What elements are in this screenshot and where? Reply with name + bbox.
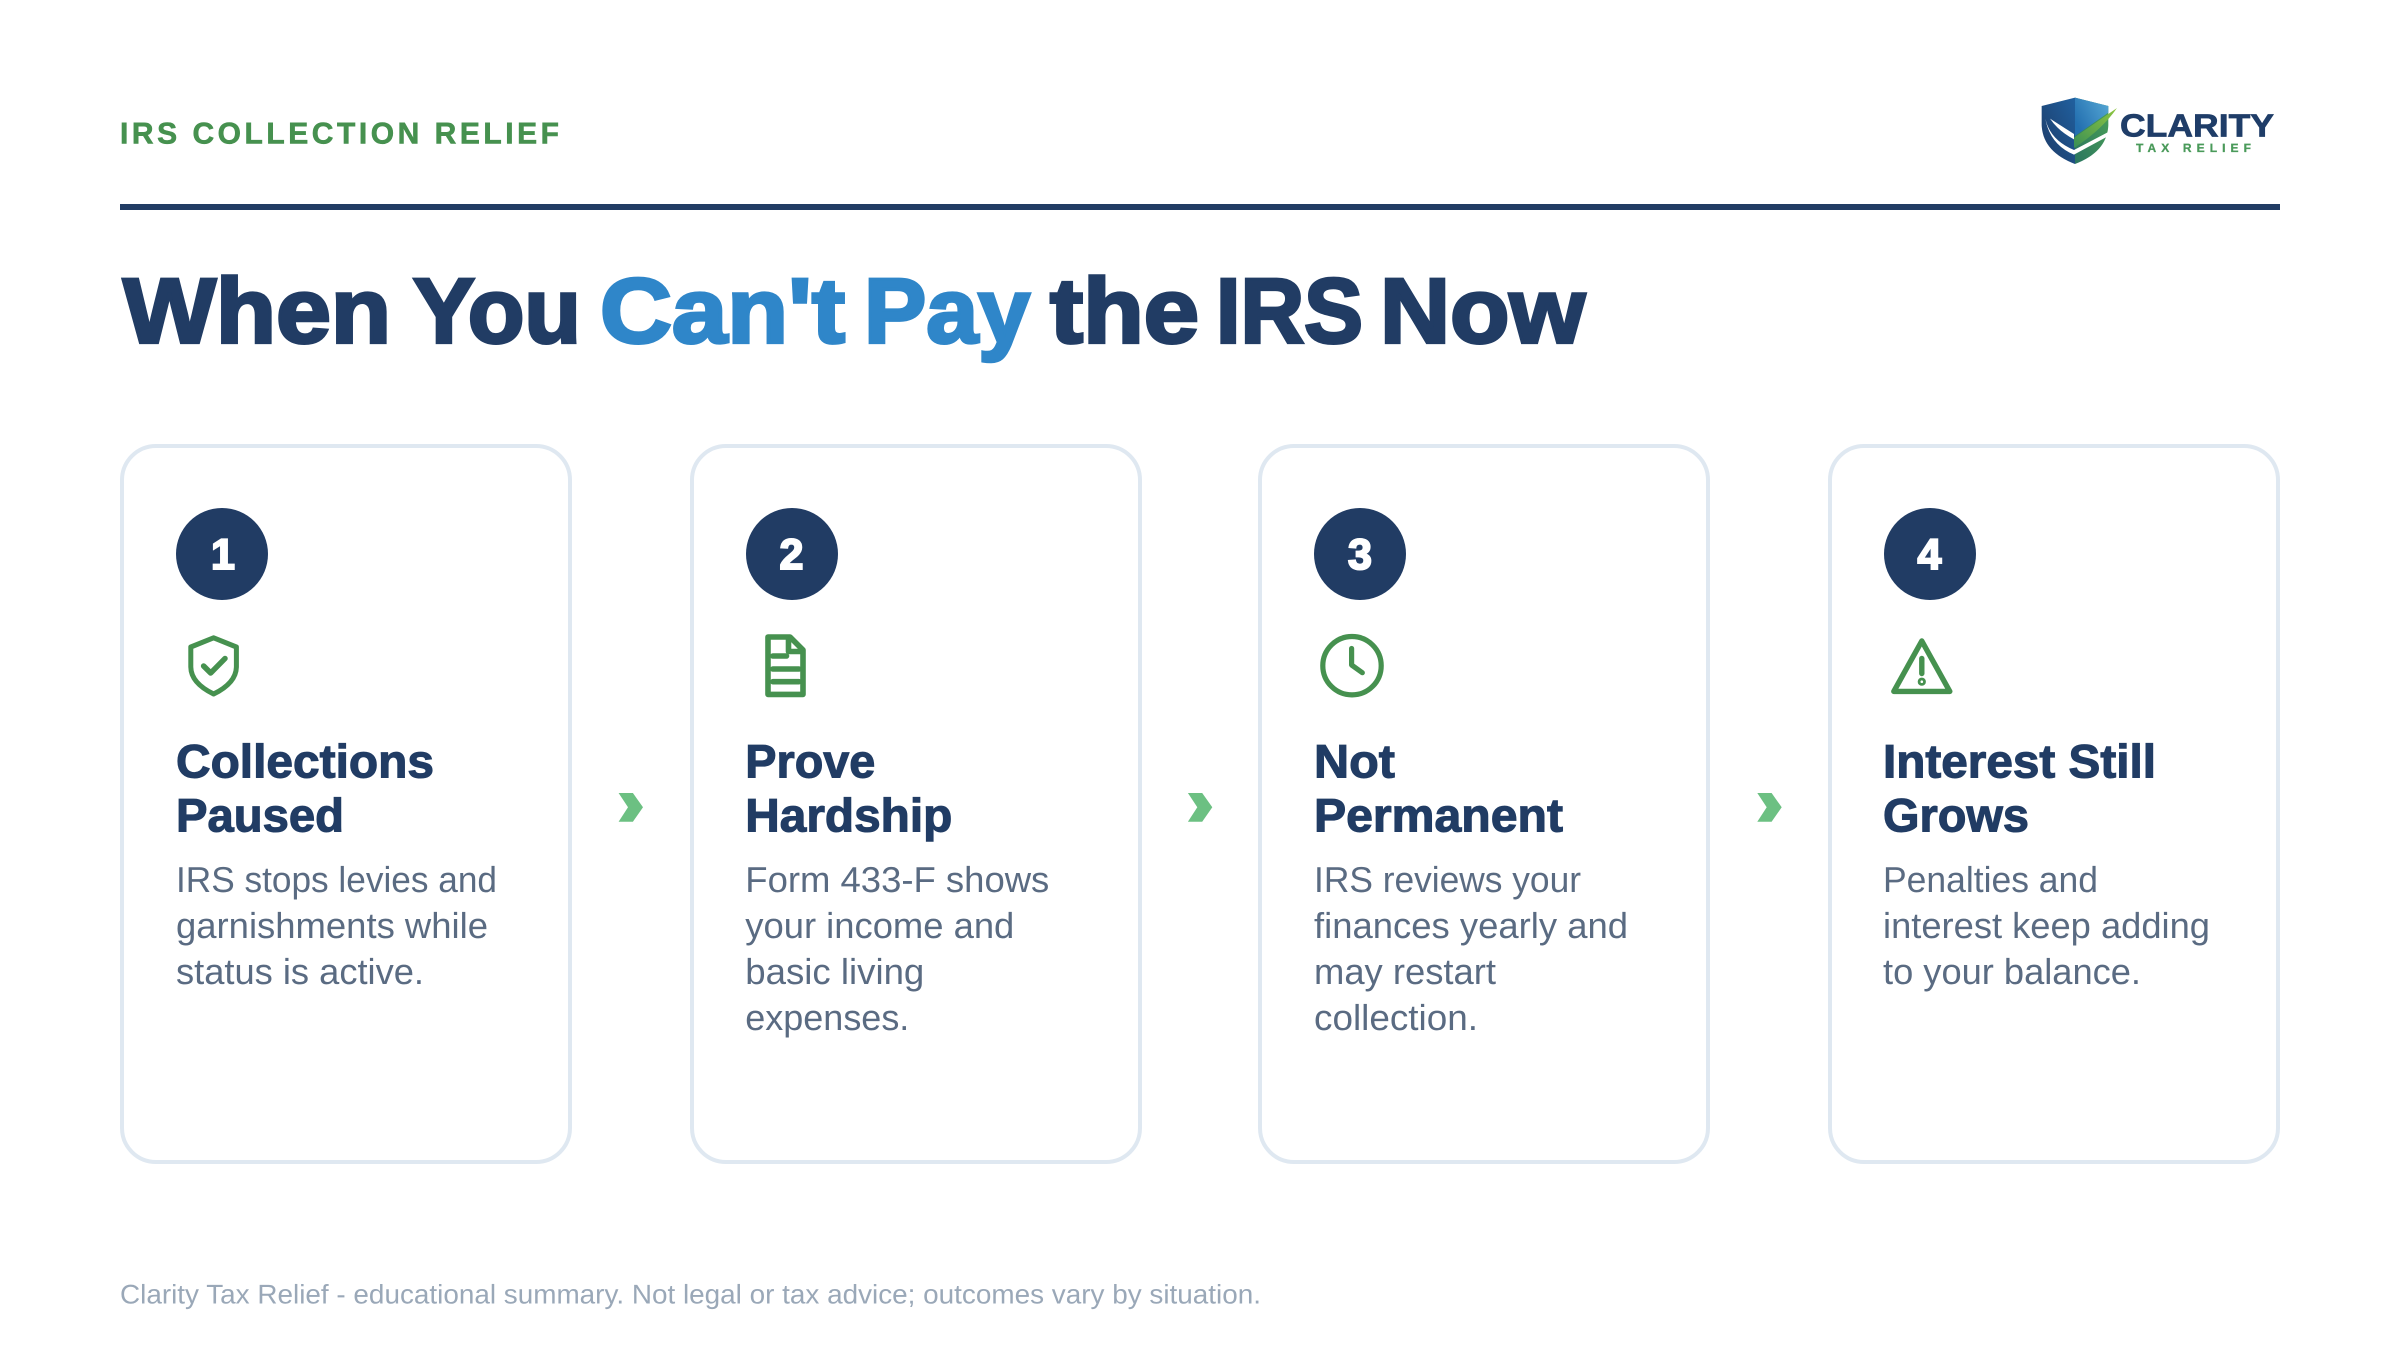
number badge 1 xyxy=(176,508,268,600)
footer disclaimer: Clarity Tax Relief - educational summary. Not legal or tax advice; outcomes vary by situation. xyxy=(120,1280,1261,1310)
panel: step 2 Prove Hardship xyxy=(692,446,1140,1162)
description: may restart xyxy=(1314,951,1496,992)
title: IRS xyxy=(1216,260,1363,362)
description: garnishments while xyxy=(176,905,488,946)
description: IRS stops levies and xyxy=(176,859,497,900)
arrow 1 xyxy=(619,793,643,822)
heading: Paused xyxy=(176,788,344,841)
description: to your balance. xyxy=(1883,951,2141,992)
eyebrow label: IRS COLLECTION RELIEF xyxy=(120,118,559,150)
title: Pay xyxy=(864,260,1030,362)
arrow 3 xyxy=(1757,793,1782,822)
icon: document xyxy=(768,637,803,694)
description: collection. xyxy=(1314,997,1478,1038)
heading: Permanent xyxy=(1314,788,1563,841)
title xyxy=(123,260,1585,362)
description xyxy=(1883,859,2210,992)
description: basic living xyxy=(745,951,924,992)
logo tagline: TAX RELIEF xyxy=(2136,141,2251,155)
logo shield icon xyxy=(2042,98,2117,164)
number badge 1: 1 xyxy=(211,531,235,579)
logo: Clarity Tax Relief xyxy=(2042,98,2274,164)
title: Now xyxy=(1380,260,1585,362)
number badge 4: 4 xyxy=(1918,531,1942,579)
heading xyxy=(176,734,434,841)
number badge 4 xyxy=(1884,508,1976,600)
heading: Hardship xyxy=(745,788,952,841)
icon: warning triangle xyxy=(1894,641,1950,691)
title: You xyxy=(413,260,581,362)
description: IRS reviews your xyxy=(1314,859,1581,900)
description xyxy=(745,859,1049,1038)
heading: Not xyxy=(1314,734,1395,787)
heading xyxy=(745,734,952,841)
icon: clock xyxy=(1323,636,1381,695)
logo wordmark: CLARITY xyxy=(2120,108,2274,144)
description: status is active. xyxy=(176,951,424,992)
panel: step 3 Not Permanent xyxy=(1260,446,1708,1162)
card frame xyxy=(1830,446,2278,1162)
description: expenses. xyxy=(745,997,909,1038)
number badge 2: 2 xyxy=(780,531,803,579)
heading: Grows xyxy=(1883,788,2029,841)
description xyxy=(176,859,497,992)
number badge 3 xyxy=(1314,508,1406,600)
description: your income and xyxy=(745,905,1014,946)
heading: Collections xyxy=(176,734,434,787)
heading xyxy=(1883,734,2156,841)
description: interest keep adding xyxy=(1883,905,2210,946)
heading: Interest Still xyxy=(1883,734,2156,787)
header rule xyxy=(120,204,2280,210)
number badge 3: 3 xyxy=(1348,531,1372,579)
title: Can't xyxy=(600,260,845,362)
card frame xyxy=(122,446,570,1162)
title: the xyxy=(1050,260,1199,362)
icon: shield check xyxy=(191,638,236,694)
heading xyxy=(1314,734,1563,841)
title: When xyxy=(123,260,391,362)
arrow 2 xyxy=(1188,793,1212,822)
description xyxy=(1314,859,1628,1038)
description: finances yearly and xyxy=(1314,905,1628,946)
heading: Prove xyxy=(745,734,875,787)
card frame xyxy=(692,446,1140,1162)
panel: step 4 Interest Still Grows xyxy=(1830,446,2278,1162)
description: Form 433-F shows xyxy=(745,859,1049,900)
description: Penalties and xyxy=(1883,859,2098,900)
card frame xyxy=(1260,446,1708,1162)
number badge 2 xyxy=(746,508,838,600)
panel: step 1 Collections Paused xyxy=(122,446,570,1162)
